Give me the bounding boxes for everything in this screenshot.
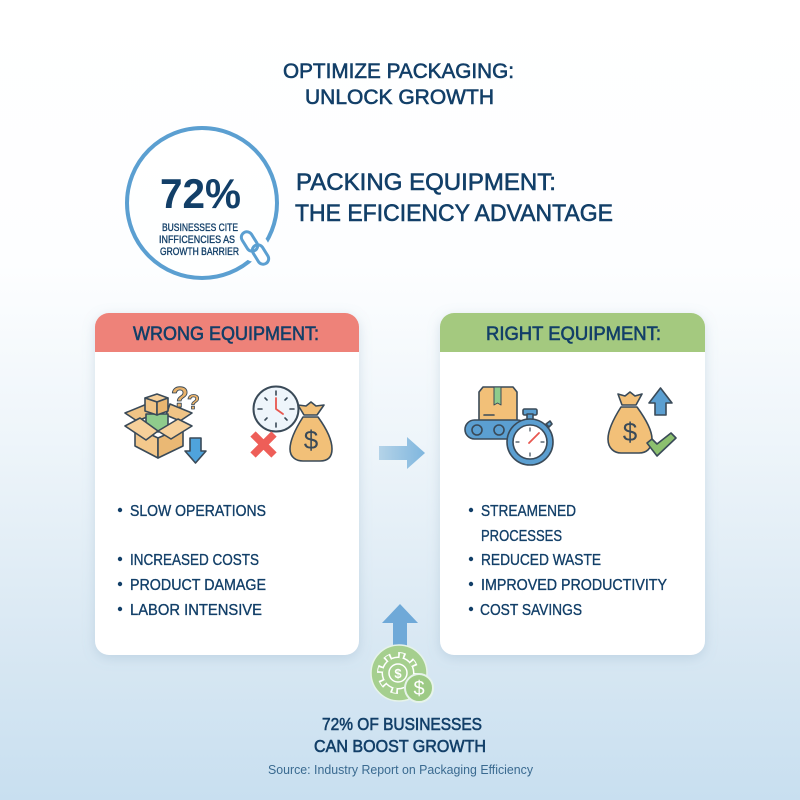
icon: money bag: $ (304, 425, 319, 455)
icon: clock (254, 386, 298, 432)
icon: gear with dollar coins: $ (394, 666, 402, 681)
section heading: THE EFICIENCY ADVANTAGE (295, 200, 613, 227)
right equipment list: STREAMENED (481, 503, 576, 520)
icon: money bag with up arrow and check: $ (623, 417, 638, 447)
icon: conveyor with box (465, 387, 527, 439)
wrong equipment list: SLOW OPERATIONS (130, 503, 266, 520)
stat value: 72% (160, 170, 241, 217)
right equipment header: RIGHT EQUIPMENT: (486, 323, 661, 345)
wrong equipment header: WRONG EQUIPMENT: (133, 323, 319, 345)
title: UNLOCK GROWTH (305, 85, 494, 109)
wrong equipment header (95, 313, 359, 352)
icon: gear with dollar coins (371, 645, 433, 702)
stat circle: 72% (127, 128, 277, 278)
right equipment list: COST SAVINGS (480, 602, 582, 619)
panel: right equipment (440, 313, 705, 655)
title (283, 59, 514, 109)
stat caption: INFFICENCIES AS (159, 234, 235, 246)
arrow: up to growth (382, 604, 418, 648)
title: OPTIMIZE PACKAGING: (283, 59, 514, 83)
stat caption: GROWTH BARRIER (160, 246, 239, 258)
icon: broken chain (239, 230, 271, 266)
icon: red X (253, 434, 274, 455)
icon: open box with question marks (125, 382, 206, 463)
right equipment list: IMPROVED PRODUCTIVITY (481, 577, 667, 594)
panel: wrong equipment (95, 313, 359, 655)
stat caption (159, 222, 239, 258)
source: Source: Industry Report on Packaging Efficiency (268, 763, 534, 777)
arrow: wrong to right (379, 437, 425, 469)
right equipment list: PROCESSES (481, 528, 562, 545)
wrong equipment list: LABOR INTENSIVE (130, 602, 262, 619)
right equipment list: REDUCED WASTE (481, 552, 601, 569)
icon: gear with dollar coins: $ (413, 678, 425, 700)
section heading (295, 169, 613, 227)
conclusion text: CAN BOOST GROWTH (314, 736, 486, 756)
right equipment list (469, 503, 667, 619)
section heading: PACKING EQUIPMENT: (296, 169, 556, 196)
conclusion text: 72% OF BUSINESSES (322, 714, 482, 734)
conclusion text (314, 714, 486, 756)
wrong equipment list (118, 503, 266, 619)
right equipment header (440, 313, 705, 352)
icon: stopwatch (507, 409, 553, 465)
stat caption: BUSINESSES CITE (162, 222, 238, 234)
wrong equipment list: PRODUCT DAMAGE (130, 577, 266, 594)
icon: down arrow (185, 438, 206, 463)
icon: open box with question marks: ? (171, 382, 189, 414)
icon: money bag (290, 402, 332, 461)
icon: money bag with up arrow and check (608, 388, 676, 456)
icon: open box with question marks: ? (187, 391, 200, 414)
wrong equipment list: INCREASED COSTS (130, 552, 259, 569)
